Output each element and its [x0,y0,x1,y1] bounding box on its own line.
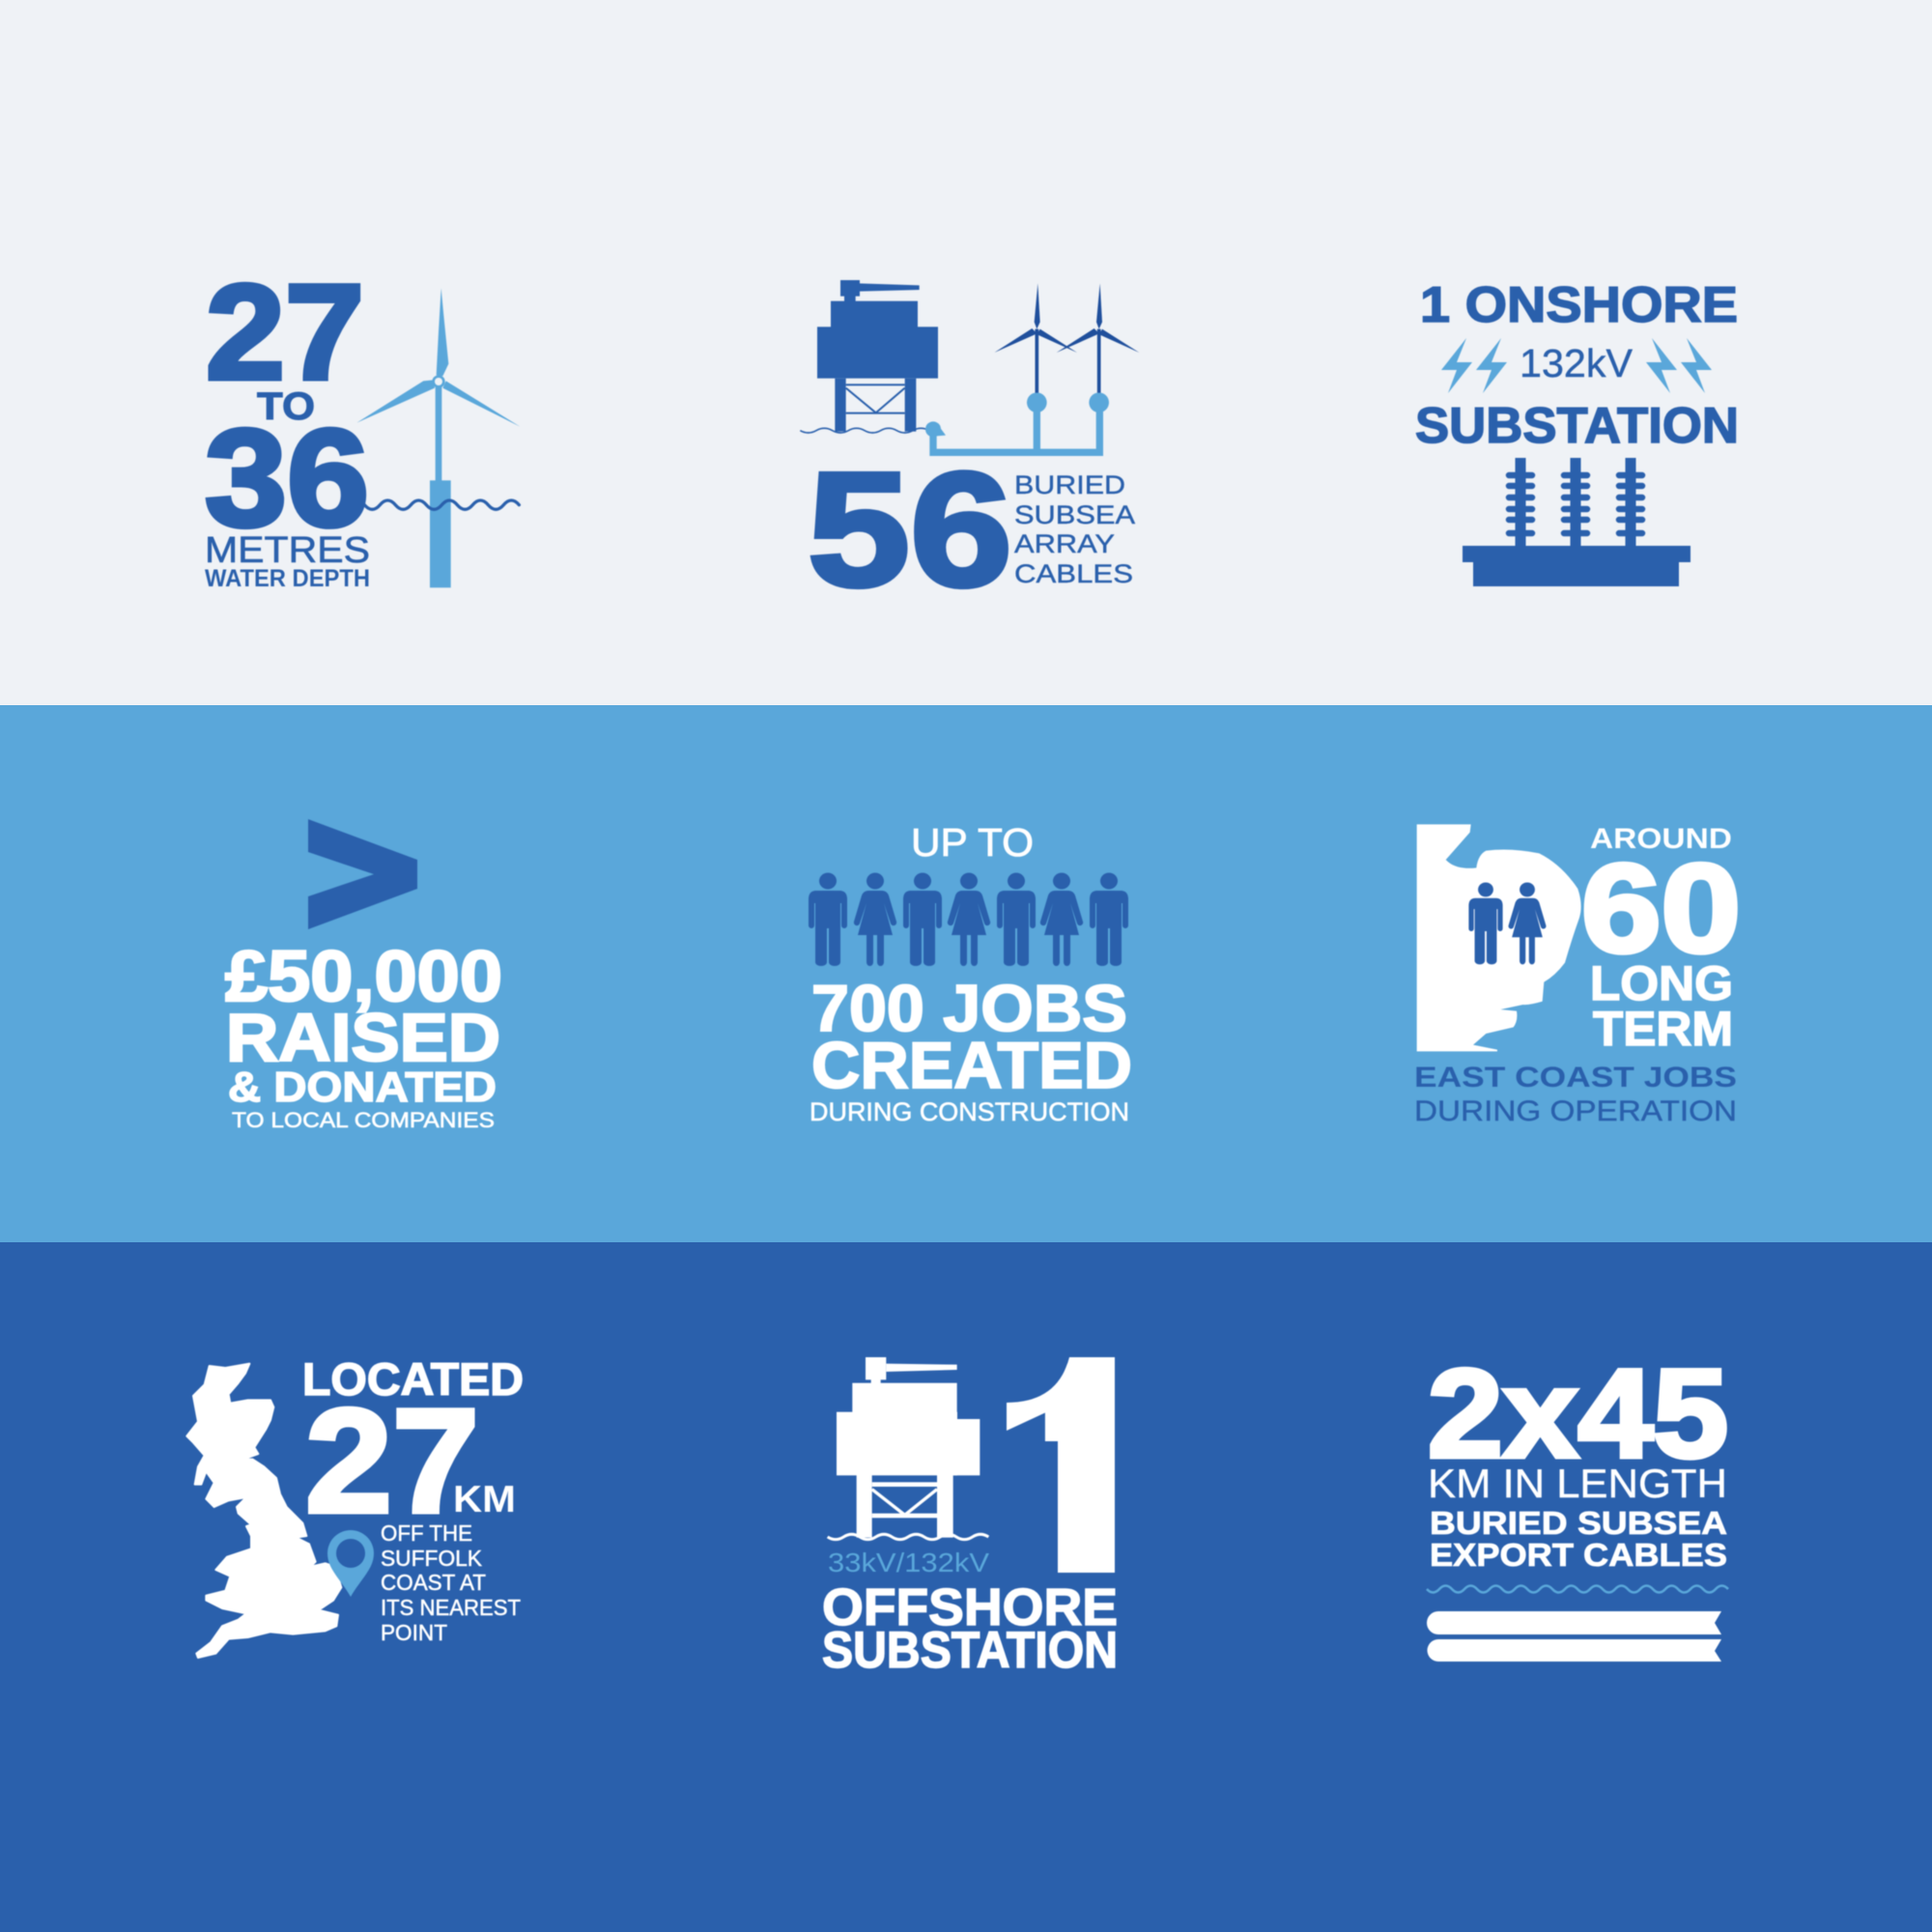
text: created: CREATED [811,1029,1132,1102]
icon: row of people [809,873,1128,966]
text: off the suffolk coast: OFF THE [381,1520,472,1546]
text: term: TERM [1593,1002,1733,1056]
number: 60: 60 [1581,838,1741,979]
number: 2x45: 2x45 [1428,1343,1728,1484]
text: buried subsea array cables: SUBSEA [1014,500,1135,529]
panel: money raised [225,819,502,1132]
icon: UK map [186,1364,341,1658]
number: 36: 36 [205,402,369,555]
icon: offshore platform [828,1357,988,1540]
icon: buried cables [1427,1611,1721,1662]
icon: lightning bolts [1441,338,1712,393]
text: metres: METRES [205,530,370,571]
text: voltage: 33kV/132kV [828,1548,989,1577]
text: to local companies: TO LOCAL COMPANIES [232,1108,495,1132]
text: up to: UP TO [911,820,1034,865]
icon: greater-than chevron [308,819,417,929]
icon: wind turbine in water [356,288,520,587]
background band: light [0,0,1932,705]
background band: mid blue [0,705,1932,1242]
text: long: LONG [1590,956,1733,1010]
panel: onshore substation [1415,277,1739,586]
text: off the suffolk coast: COAST AT [381,1570,486,1595]
heading: substation: SUBSTATION [1415,398,1739,454]
panel: export cables [1427,1343,1728,1662]
number: 1: 1 [960,1297,1187,1637]
text: buried subsea array cables: CABLES [1014,559,1133,588]
panel: location [186,1353,524,1658]
icon: man and woman [1468,882,1547,964]
text: km: KM [453,1479,516,1520]
text: off the suffolk coast: ITS NEAREST [381,1595,521,1620]
text: around: AROUND [1590,823,1732,855]
text: buried subsea array cables: BURIED [1014,470,1125,499]
text: offshore: OFFSHORE [822,1578,1118,1636]
panel: long term jobs [1414,823,1741,1127]
panel: water depth [205,256,520,592]
text: and donated: & DONATED [228,1064,497,1111]
number: 27: 27 [206,256,364,408]
icon: offshore platform and turbines [800,280,1139,452]
text: during operation: DURING OPERATION [1414,1095,1737,1127]
number: 27: 27 [305,1378,479,1544]
text: off the suffolk coast [381,1520,521,1645]
panel: construction jobs [809,820,1132,1126]
text: off the suffolk coast: POINT [381,1620,447,1645]
panel: offshore substation [822,1297,1187,1679]
icon: east coast map [1417,824,1581,1051]
text: buried subsea array cables [1014,470,1135,588]
panel: array cables [800,280,1139,620]
heading: 1 onshore: 1 ONSHORE [1420,277,1738,333]
text: buried subsea array cables: ARRAY [1014,529,1115,558]
text: to: TO [257,385,315,428]
icon: transformer [1463,458,1690,586]
text: buried subsea: BURIED SUBSEA [1430,1505,1727,1541]
text: 132kV: 132kV [1520,341,1634,385]
text: water depth: WATER DEPTH [205,565,370,592]
text: 700 jobs: 700 JOBS [811,972,1127,1045]
text: export cables: EXPORT CABLES [1430,1537,1727,1573]
number: 56: 56 [808,439,1012,620]
text: substation: SUBSTATION [822,1622,1118,1679]
text: raised: RAISED [226,1000,500,1075]
background band: dark blue [0,1242,1932,1932]
text: east coast jobs: EAST COAST JOBS [1414,1062,1737,1094]
text: during construction: DURING CONSTRUCTION [810,1097,1129,1126]
icon: wave line [1427,1586,1728,1592]
text: km in length: KM IN LENGTH [1428,1461,1727,1506]
number: £50,000: £50,000 [225,936,502,1016]
icon: location pin [327,1530,374,1597]
text: off the suffolk coast: SUFFOLK [381,1546,483,1571]
text: located: LOCATED [302,1353,524,1405]
